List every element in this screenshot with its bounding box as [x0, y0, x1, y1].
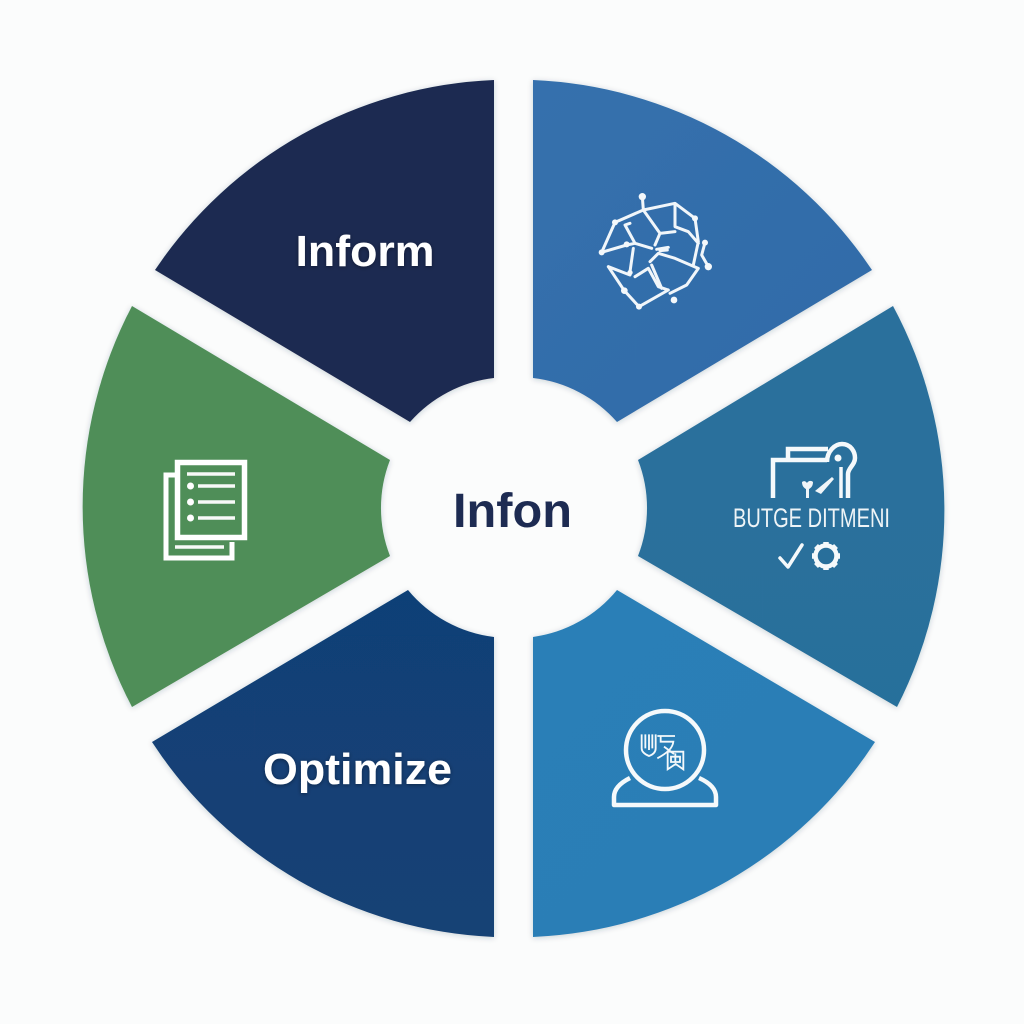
panel: review segment — [533, 590, 875, 937]
panel: document segment — [83, 306, 390, 707]
label text: BUTGE DITMENI — [733, 503, 890, 533]
panel: budget segment — [638, 306, 944, 707]
panel: network segment — [533, 80, 872, 422]
back page — [166, 475, 232, 558]
panel: Optimize segment — [152, 590, 494, 937]
inner glyphs — [642, 734, 683, 769]
tools — [802, 477, 834, 498]
icon: documents — [166, 462, 244, 558]
check mark — [780, 545, 802, 567]
heading: Inform: Inform — [296, 227, 434, 276]
heading: Optimize: Optimize — [263, 745, 452, 794]
gear — [812, 542, 840, 570]
icon: network globe — [599, 193, 712, 310]
bullets — [187, 482, 194, 490]
icon: budget folder with label — [733, 444, 890, 570]
keyhole dot — [834, 454, 842, 462]
wheel diagram — [83, 80, 944, 937]
list lines — [175, 474, 235, 547]
folder and key outline — [773, 449, 828, 498]
panel: Inform segment — [155, 80, 494, 422]
icon: person with globe — [614, 711, 716, 805]
front page — [178, 462, 244, 538]
network nodes — [639, 193, 646, 200]
heading: center Infon: Infon — [453, 485, 572, 538]
